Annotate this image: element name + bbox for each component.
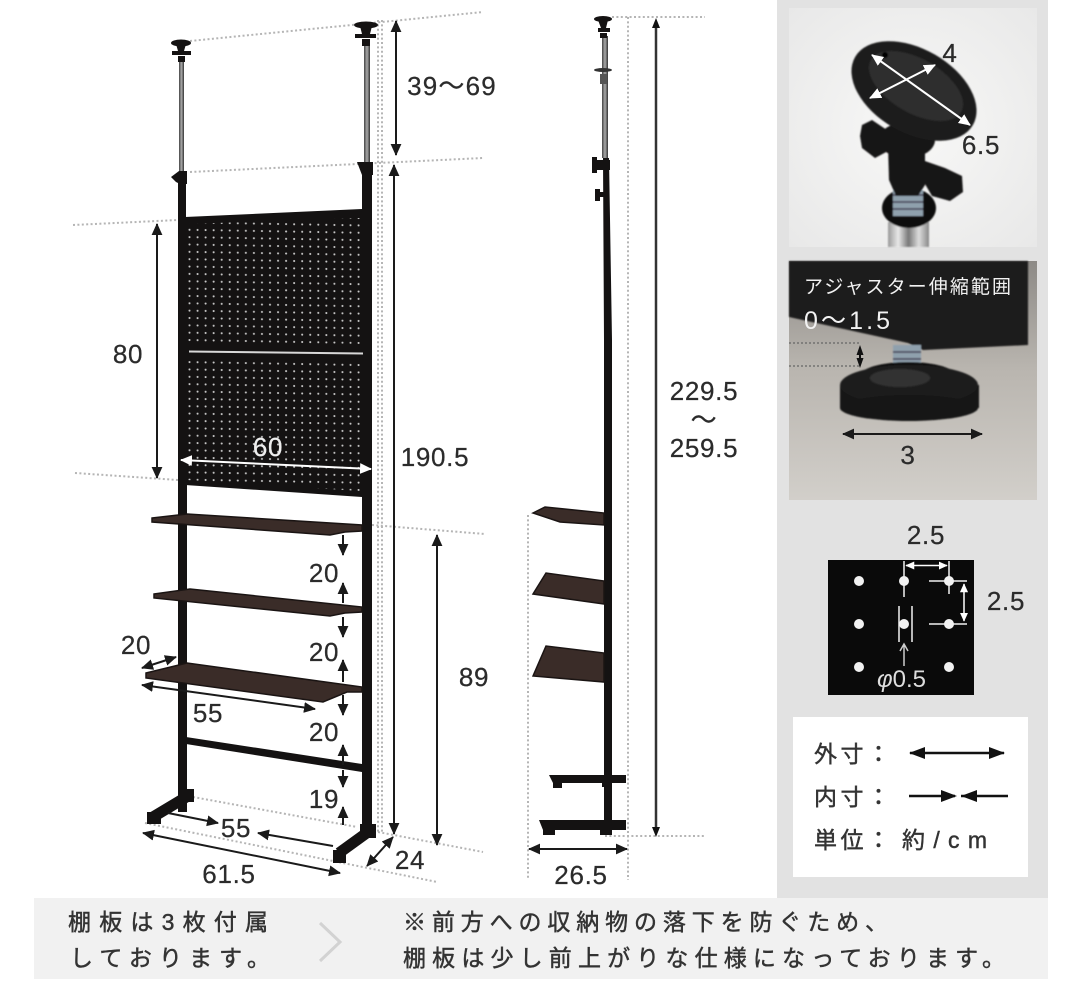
dimension: total height: 259.5 [670, 433, 738, 463]
shelf 3 [146, 663, 362, 702]
dimension: total height: 〜 [691, 405, 717, 435]
side feet [539, 775, 626, 835]
shelf spacing dimensions: 19 [309, 784, 339, 814]
note: shelf angle: ※前方への収納物の落下を防ぐため、 [403, 909, 888, 935]
legend: inner dimension [814, 784, 1008, 810]
dimension: inner width 55 [168, 813, 333, 846]
dimension: total height: 229.5 [670, 376, 738, 406]
note: shelves included: 棚板は3枚付属 [68, 909, 268, 935]
dimension: shelf width 55 [142, 685, 315, 728]
adjuster foot hardware [789, 261, 1028, 421]
shelf spacing dimensions [309, 535, 343, 825]
tension rods and ceiling caps [171, 22, 378, 184]
side view of the rack [528, 16, 738, 890]
dimension: 3 [843, 434, 982, 470]
shelf spacing dimensions: 20 [309, 717, 339, 747]
shelf spacing dimensions: 20 [309, 637, 339, 667]
front view of the rack [73, 12, 497, 889]
base feet [147, 789, 376, 863]
dimension: 3: 3 [900, 440, 916, 470]
uprights [178, 172, 372, 835]
photo: ceiling cap [789, 8, 1037, 247]
pegboard hole detail [828, 520, 1025, 695]
lower cross bar [186, 737, 362, 772]
dimension: 6.5: 6.5 [962, 130, 1000, 160]
legend [793, 717, 1028, 877]
dimension: 4: 4 [942, 38, 958, 68]
dimension: 61.5: 61.5 [202, 859, 256, 889]
dimension: 39〜69: 39〜69 [407, 71, 497, 101]
icon: adjuster height arrow [856, 345, 864, 368]
shelf 1 [152, 514, 362, 535]
dimension: 89: 89 [459, 662, 489, 692]
dimension: shelf depth 20 [121, 630, 176, 668]
dimension: 6.5 [872, 55, 1000, 160]
dimension: 4 [870, 38, 958, 98]
dimension: 2.5 horizontal label: 2.5 [907, 520, 945, 550]
dimension: 61.5 [143, 833, 340, 889]
dimension: 24: 24 [395, 845, 425, 875]
dimension: inner width 55: 55 [221, 813, 251, 843]
legend: outer dimension [814, 741, 1005, 767]
side upright [603, 158, 612, 832]
icon: chevron [320, 923, 340, 961]
dimension: 24 [367, 837, 425, 875]
shelf 2 [154, 589, 362, 616]
side shelves [533, 507, 604, 682]
dimension: shelf depth 20: 20 [121, 630, 151, 660]
note: shelves included [68, 909, 270, 971]
panel: right grey background [777, 0, 1048, 898]
label: adjuster range: アジャスター伸縮範囲 [804, 276, 1011, 298]
hole panel: φ0.5 [877, 666, 926, 693]
legend: unit [814, 827, 987, 853]
guide lines: adjuster range [789, 343, 860, 366]
guide lines: side view [528, 17, 705, 880]
legend: inner dimension: 内寸： [814, 784, 890, 810]
dimension: 60 [181, 432, 371, 469]
dimension: 190.5: 190.5 [401, 442, 469, 472]
side tension rod [592, 16, 612, 201]
legend: outer dimension: 外寸： [814, 741, 890, 767]
note: shelf angle: 棚板は少し前上がりな仕様になっております。 [403, 945, 1005, 971]
dimension: total height [652, 18, 738, 837]
legend: unit: 約/cm [902, 827, 987, 853]
legend: unit: 単位： [814, 827, 890, 853]
ceiling cap hardware [834, 21, 994, 247]
bottom note band [34, 898, 1048, 979]
guide lines: front view [73, 12, 485, 882]
note: shelves included: しております。 [70, 945, 270, 971]
dimension: 80: 80 [113, 339, 143, 369]
dimension: 60: 60 [253, 432, 283, 462]
note: shelf angle [403, 909, 1005, 971]
value: 0〜1.5: 0〜1.5 [804, 307, 890, 335]
dimension: 39〜69 [396, 21, 497, 155]
dimension: 26.5 [529, 849, 627, 890]
hole panel [828, 560, 974, 695]
shelf spacing dimensions: 20 [309, 558, 339, 588]
dimension: 26.5: 26.5 [554, 860, 608, 890]
dimension: 2.5 vertical label: 2.5 [987, 586, 1025, 616]
photo: adjuster [789, 261, 1037, 500]
pegboard panel [185, 209, 363, 497]
dimension: shelf width 55: 55 [193, 698, 223, 728]
